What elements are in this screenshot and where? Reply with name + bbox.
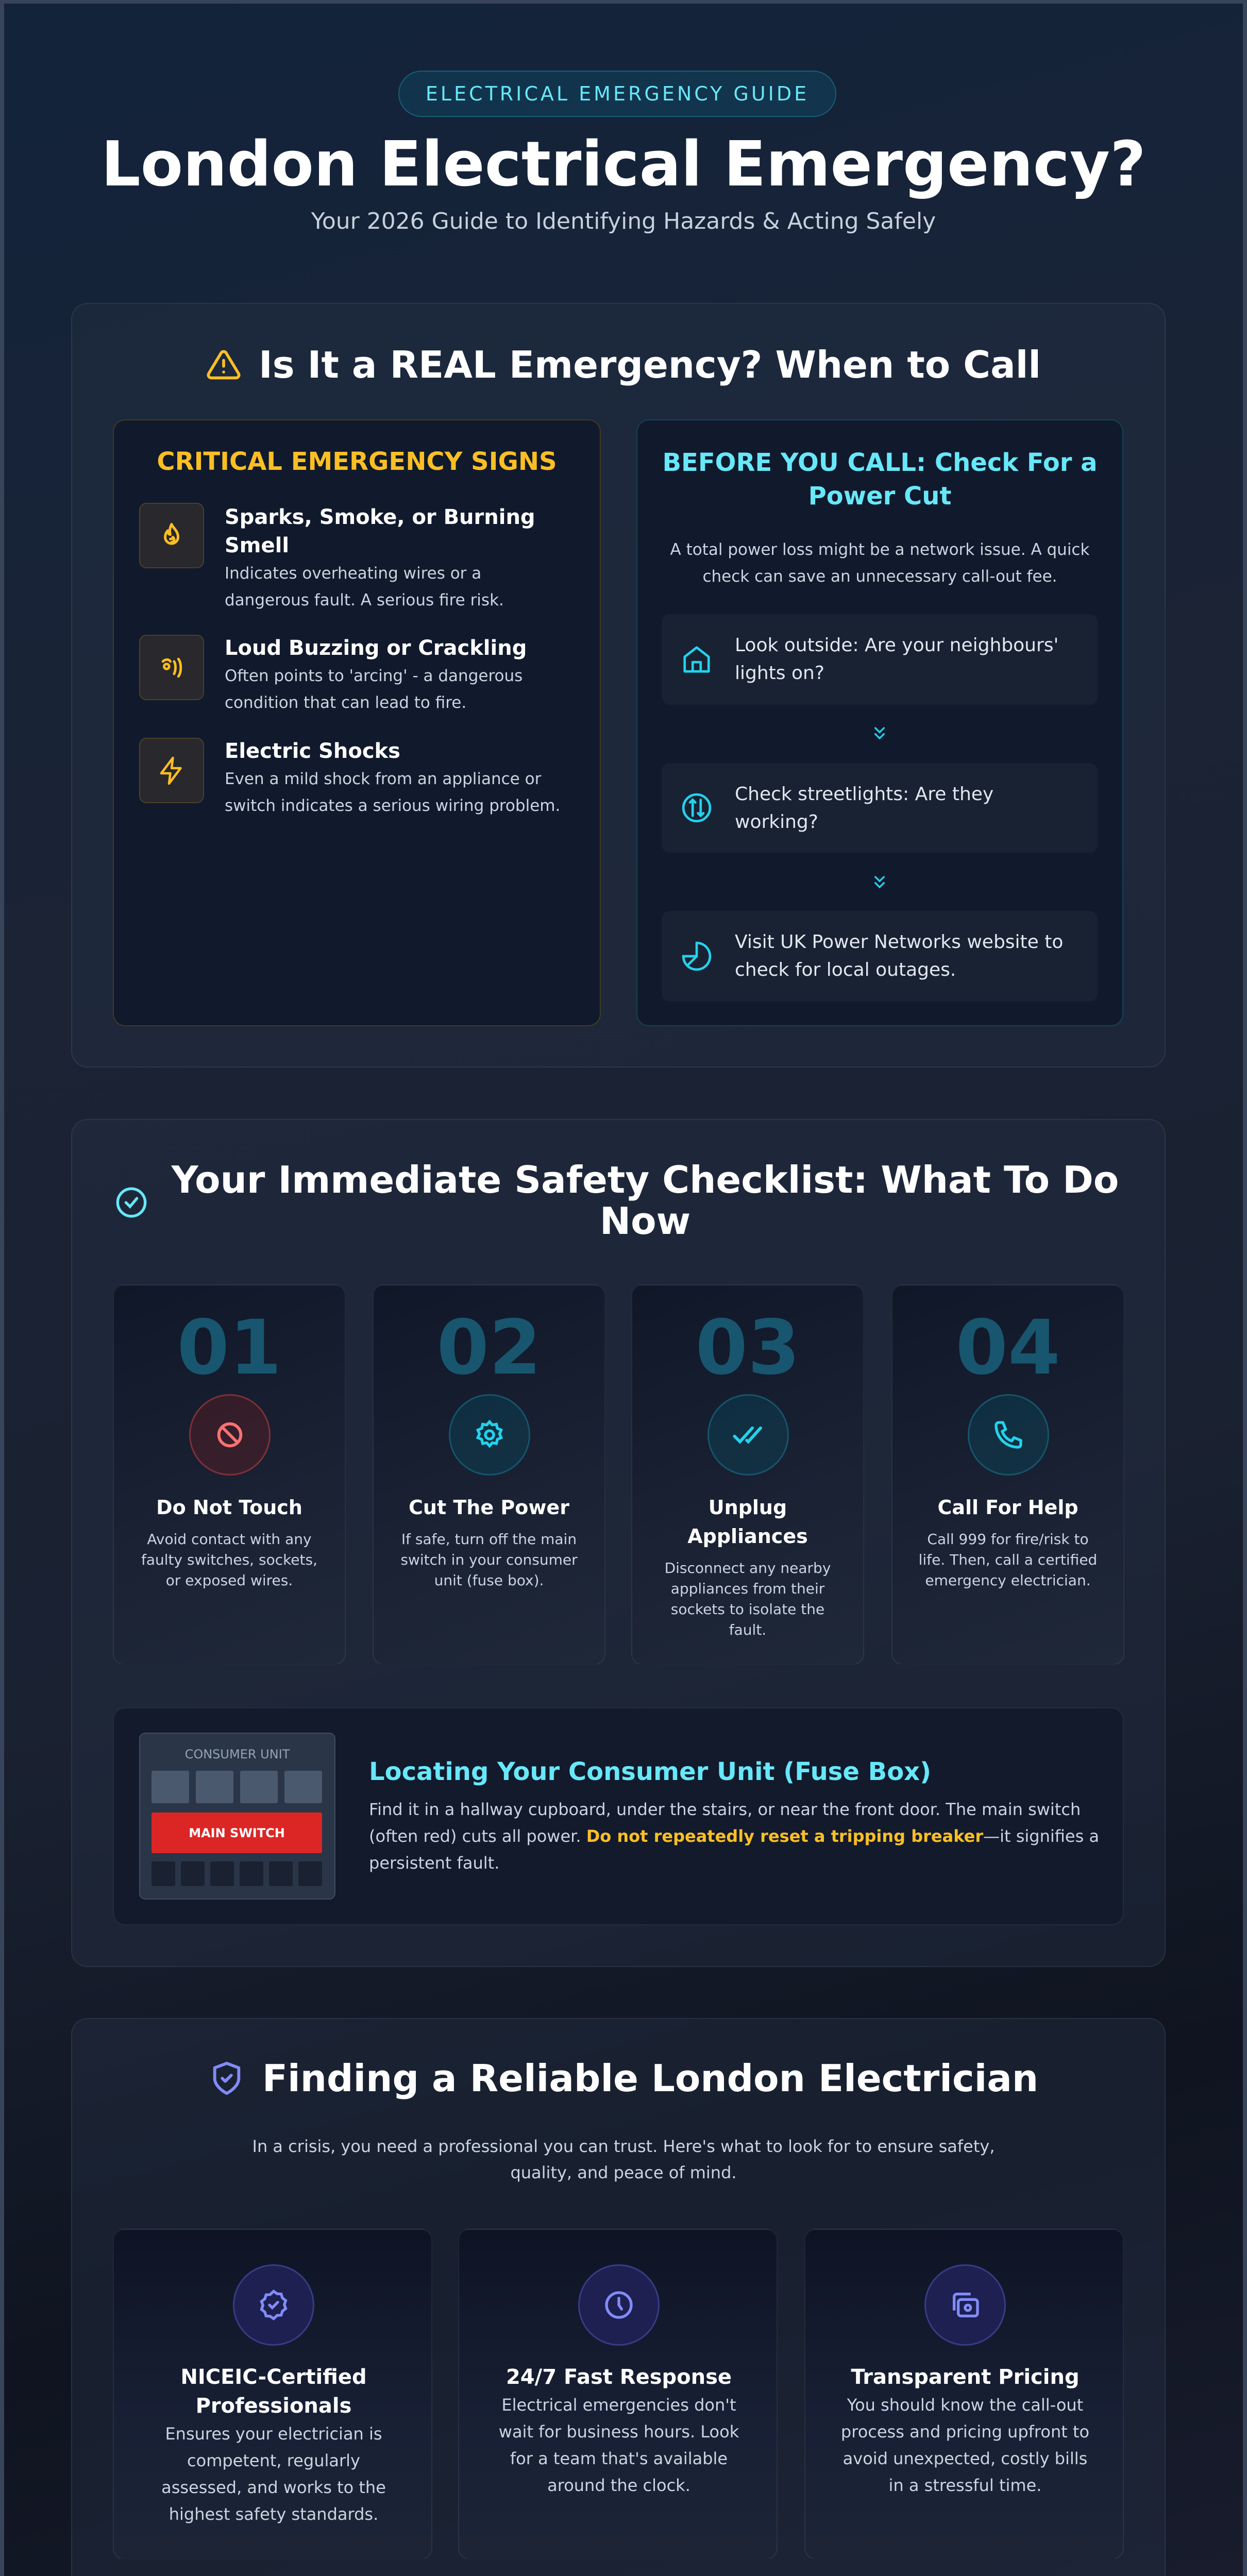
text: intro: In a crisis, you need a professional you can trust. Here's what to look for to ensure safety, quality, and peace of mind. <box>252 2137 995 2182</box>
icon: buzzing <box>139 635 204 700</box>
card: step 01: Avoid contact with any faulty switches, sockets, or exposed wires. <box>141 1531 317 1589</box>
card: 24/7 <box>458 2229 778 2560</box>
card: pricing <box>804 2229 1124 2560</box>
text: sparks smoke: Sparks, Smoke, or Burning Smell <box>225 505 535 557</box>
text: consumer unit: Find it in a hallway cupboard, under the stairs, or near the front door. The main switch (often red) cuts all power. Do not repeatedly reset a tripping breaker—it signifies a persistent fault. <box>369 1800 1099 1873</box>
heading: critical signs: CRITICAL EMERGENCY SIGNS <box>157 447 557 476</box>
step: streetlights <box>662 763 1098 853</box>
graphic: consumer unit: MAIN SWITCH <box>189 1826 285 1840</box>
title: London Electrical Emergency? <box>101 129 1146 200</box>
card: before you call <box>636 419 1123 1026</box>
text: shocks: Electric Shocks <box>225 739 400 763</box>
card: step 02: Cut The Power <box>409 1496 569 1519</box>
text: shocks <box>225 739 560 815</box>
panel: safety checklist <box>71 1119 1166 1967</box>
icon: flame <box>139 503 204 568</box>
step: neighbours <box>662 614 1098 705</box>
arrow: chevron <box>874 727 885 740</box>
card: pricing: Transparent Pricing <box>851 2365 1080 2389</box>
icon: phone <box>968 1394 1049 1476</box>
step: streetlights: Check streetlights: Are they working? <box>735 784 993 833</box>
icon: badge check <box>233 2264 314 2346</box>
icon: zap <box>139 738 204 803</box>
heading: finding electrician: Finding a Reliable London Electrician <box>262 2057 1038 2100</box>
icon: check circle <box>116 1187 146 1218</box>
text: buzzing: Often points to 'arcing' - a dangerous condition that can lead to fire. <box>225 667 523 712</box>
heading: safety checklist: Your Immediate Safety Checklist: What To Do Now <box>172 1158 1119 1243</box>
card: step 02: If safe, turn off the main switch in your consumer unit (fuse box). <box>400 1531 578 1589</box>
card: step 03: Disconnect any nearby appliances from their sockets to isolate the fault. <box>665 1560 831 1638</box>
icon: ban <box>189 1394 271 1476</box>
card: niceic: Ensures your electrician is competent, regularly assessed, and works to the highest safety standards. <box>161 2424 386 2524</box>
card: step 01: 01 <box>177 1304 282 1392</box>
badge: guide label <box>398 71 836 117</box>
text: sparks smoke <box>225 505 535 609</box>
card: step 01 <box>113 1284 346 1665</box>
card: step 02 <box>373 1284 605 1665</box>
card: 24/7: 24/7 Fast Response <box>506 2365 732 2389</box>
card: step 03: 03 <box>695 1304 800 1392</box>
icon: warning triangle <box>207 350 241 379</box>
text: buzzing <box>225 636 527 712</box>
heading: before you call: BEFORE YOU CALL: Check For a Power Cut <box>662 448 1098 511</box>
card: niceic <box>113 2229 432 2560</box>
panel: finding electrician <box>71 2018 1166 2576</box>
icon: double check <box>707 1394 789 1476</box>
panel: consumer unit <box>113 1707 1124 1925</box>
card: step 03 <box>631 1284 864 1665</box>
graphic: consumer unit <box>139 1733 335 1900</box>
card: critical emergency signs <box>113 419 601 1026</box>
text: intro: A total power loss might be a network issue. A quick check can save an unnecessary call-out fee. <box>670 540 1089 586</box>
card: step 04: Call 999 for fire/risk to life. Then, call a certified emergency electrician. <box>919 1531 1097 1589</box>
step: website <box>662 911 1098 1002</box>
heading: is it a real emergency: Is It a REAL Emergency? When to Call <box>259 343 1041 386</box>
card: step 04: Call For Help <box>937 1496 1079 1519</box>
arrow: chevron <box>874 876 885 888</box>
heading: locating consumer unit: Locating Your Consumer Unit (Fuse Box) <box>369 1757 931 1786</box>
card: 24/7: Electrical emergencies don't wait for business hours. Look for a team that's available around the clock. <box>499 2395 739 2495</box>
icon: clock <box>578 2264 660 2346</box>
subtitle: Your 2026 Guide to Identifying Hazards & Acting Safely <box>311 208 936 234</box>
text: sparks smoke: Indicates overheating wires or a dangerous fault. A serious fire risk. <box>225 564 504 609</box>
card: step 01: Do Not Touch <box>156 1496 302 1519</box>
badge: guide label: ELECTRICAL EMERGENCY GUIDE <box>426 82 809 105</box>
icon: shield <box>213 2062 240 2095</box>
text: shocks: Even a mild shock from an appliance or switch indicates a serious wiring problem. <box>225 770 560 815</box>
card: step 03: Unplug Appliances <box>687 1496 808 1548</box>
graphic: consumer unit: CONSUMER UNIT <box>185 1747 290 1761</box>
text: buzzing: Loud Buzzing or Crackling <box>225 636 527 660</box>
step: website: Visit UK Power Networks website to check for local outages. <box>735 931 1063 980</box>
panel: is it a real emergency <box>71 303 1166 1067</box>
card: pricing: You should know the call-out process and pricing upfront to avoid unexpected, costly bills in a stressful time. <box>841 2395 1089 2495</box>
icon: banknote <box>924 2264 1006 2346</box>
card: step 04: 04 <box>955 1304 1060 1392</box>
card: step 04 <box>891 1284 1124 1665</box>
step: neighbours: Look outside: Are your neighbours' lights on? <box>735 635 1058 684</box>
card: niceic: NICEIC-Certified Professionals <box>180 2365 367 2418</box>
icon: gear <box>449 1394 530 1476</box>
card: step 02: 02 <box>436 1304 542 1392</box>
